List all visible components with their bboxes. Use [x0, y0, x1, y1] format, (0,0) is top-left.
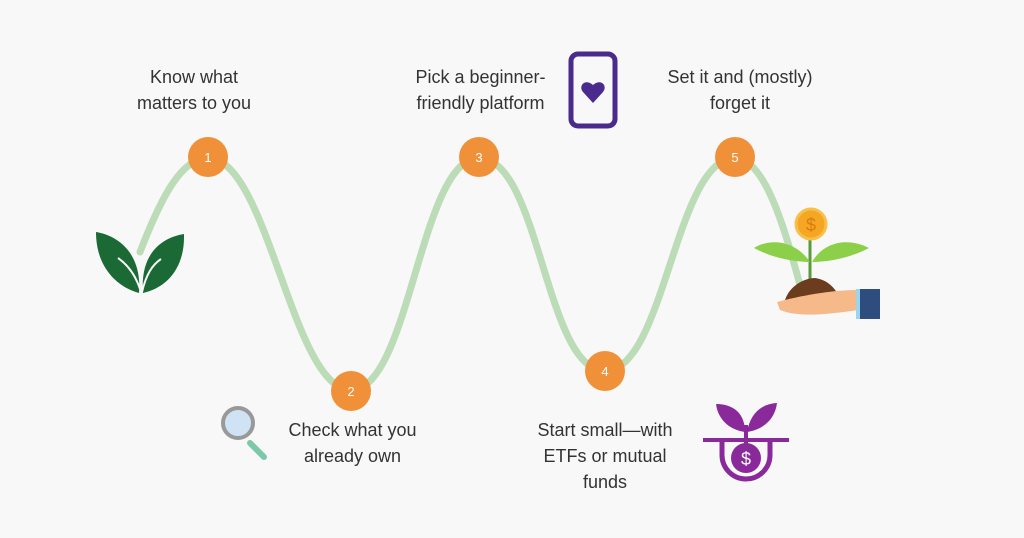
- text: step 5: [667, 67, 813, 113]
- text: step 1: Know what: [150, 67, 238, 87]
- icon: green leaves: [96, 232, 184, 293]
- text: step 3: [415, 67, 546, 113]
- wave line: [140, 158, 800, 390]
- text: step 2: already own: [304, 446, 401, 466]
- icon: hand holding plant with coin: [754, 209, 880, 319]
- text: step 1: [137, 67, 251, 113]
- step 5 marker: [715, 137, 755, 177]
- icon: purple money sprout: [703, 403, 789, 479]
- step 2 marker: [331, 371, 371, 411]
- icon: magnifying glass: [223, 408, 264, 457]
- icon: hand holding plant with coin: $: [806, 215, 816, 235]
- text: step 3: Pick a beginner-: [415, 67, 546, 87]
- step 4 marker: 4: [601, 364, 609, 379]
- step 4 marker: [585, 351, 625, 391]
- step 3 marker: [459, 137, 499, 177]
- text: step 2: [288, 420, 417, 466]
- step 3 marker: 3: [475, 150, 483, 165]
- text: step 4: [537, 420, 673, 492]
- step 5 marker: 5: [731, 150, 739, 165]
- step 2 marker: 2: [347, 384, 355, 399]
- icon: phone with heart: [571, 54, 615, 126]
- text: step 4: ETFs or mutual: [543, 446, 667, 466]
- step 1 marker: [188, 137, 228, 177]
- text: step 4: Start small—with: [537, 420, 673, 440]
- text: step 5: Set it and (mostly): [667, 67, 813, 87]
- text: step 3: friendly platform: [416, 93, 545, 113]
- text: step 2: Check what you: [288, 420, 417, 440]
- step 1 marker: 1: [204, 150, 212, 165]
- text: step 5: forget it: [710, 93, 770, 113]
- text: step 4: funds: [583, 472, 627, 492]
- icon: purple money sprout: $: [741, 449, 751, 469]
- text: step 1: matters to you: [137, 93, 251, 113]
